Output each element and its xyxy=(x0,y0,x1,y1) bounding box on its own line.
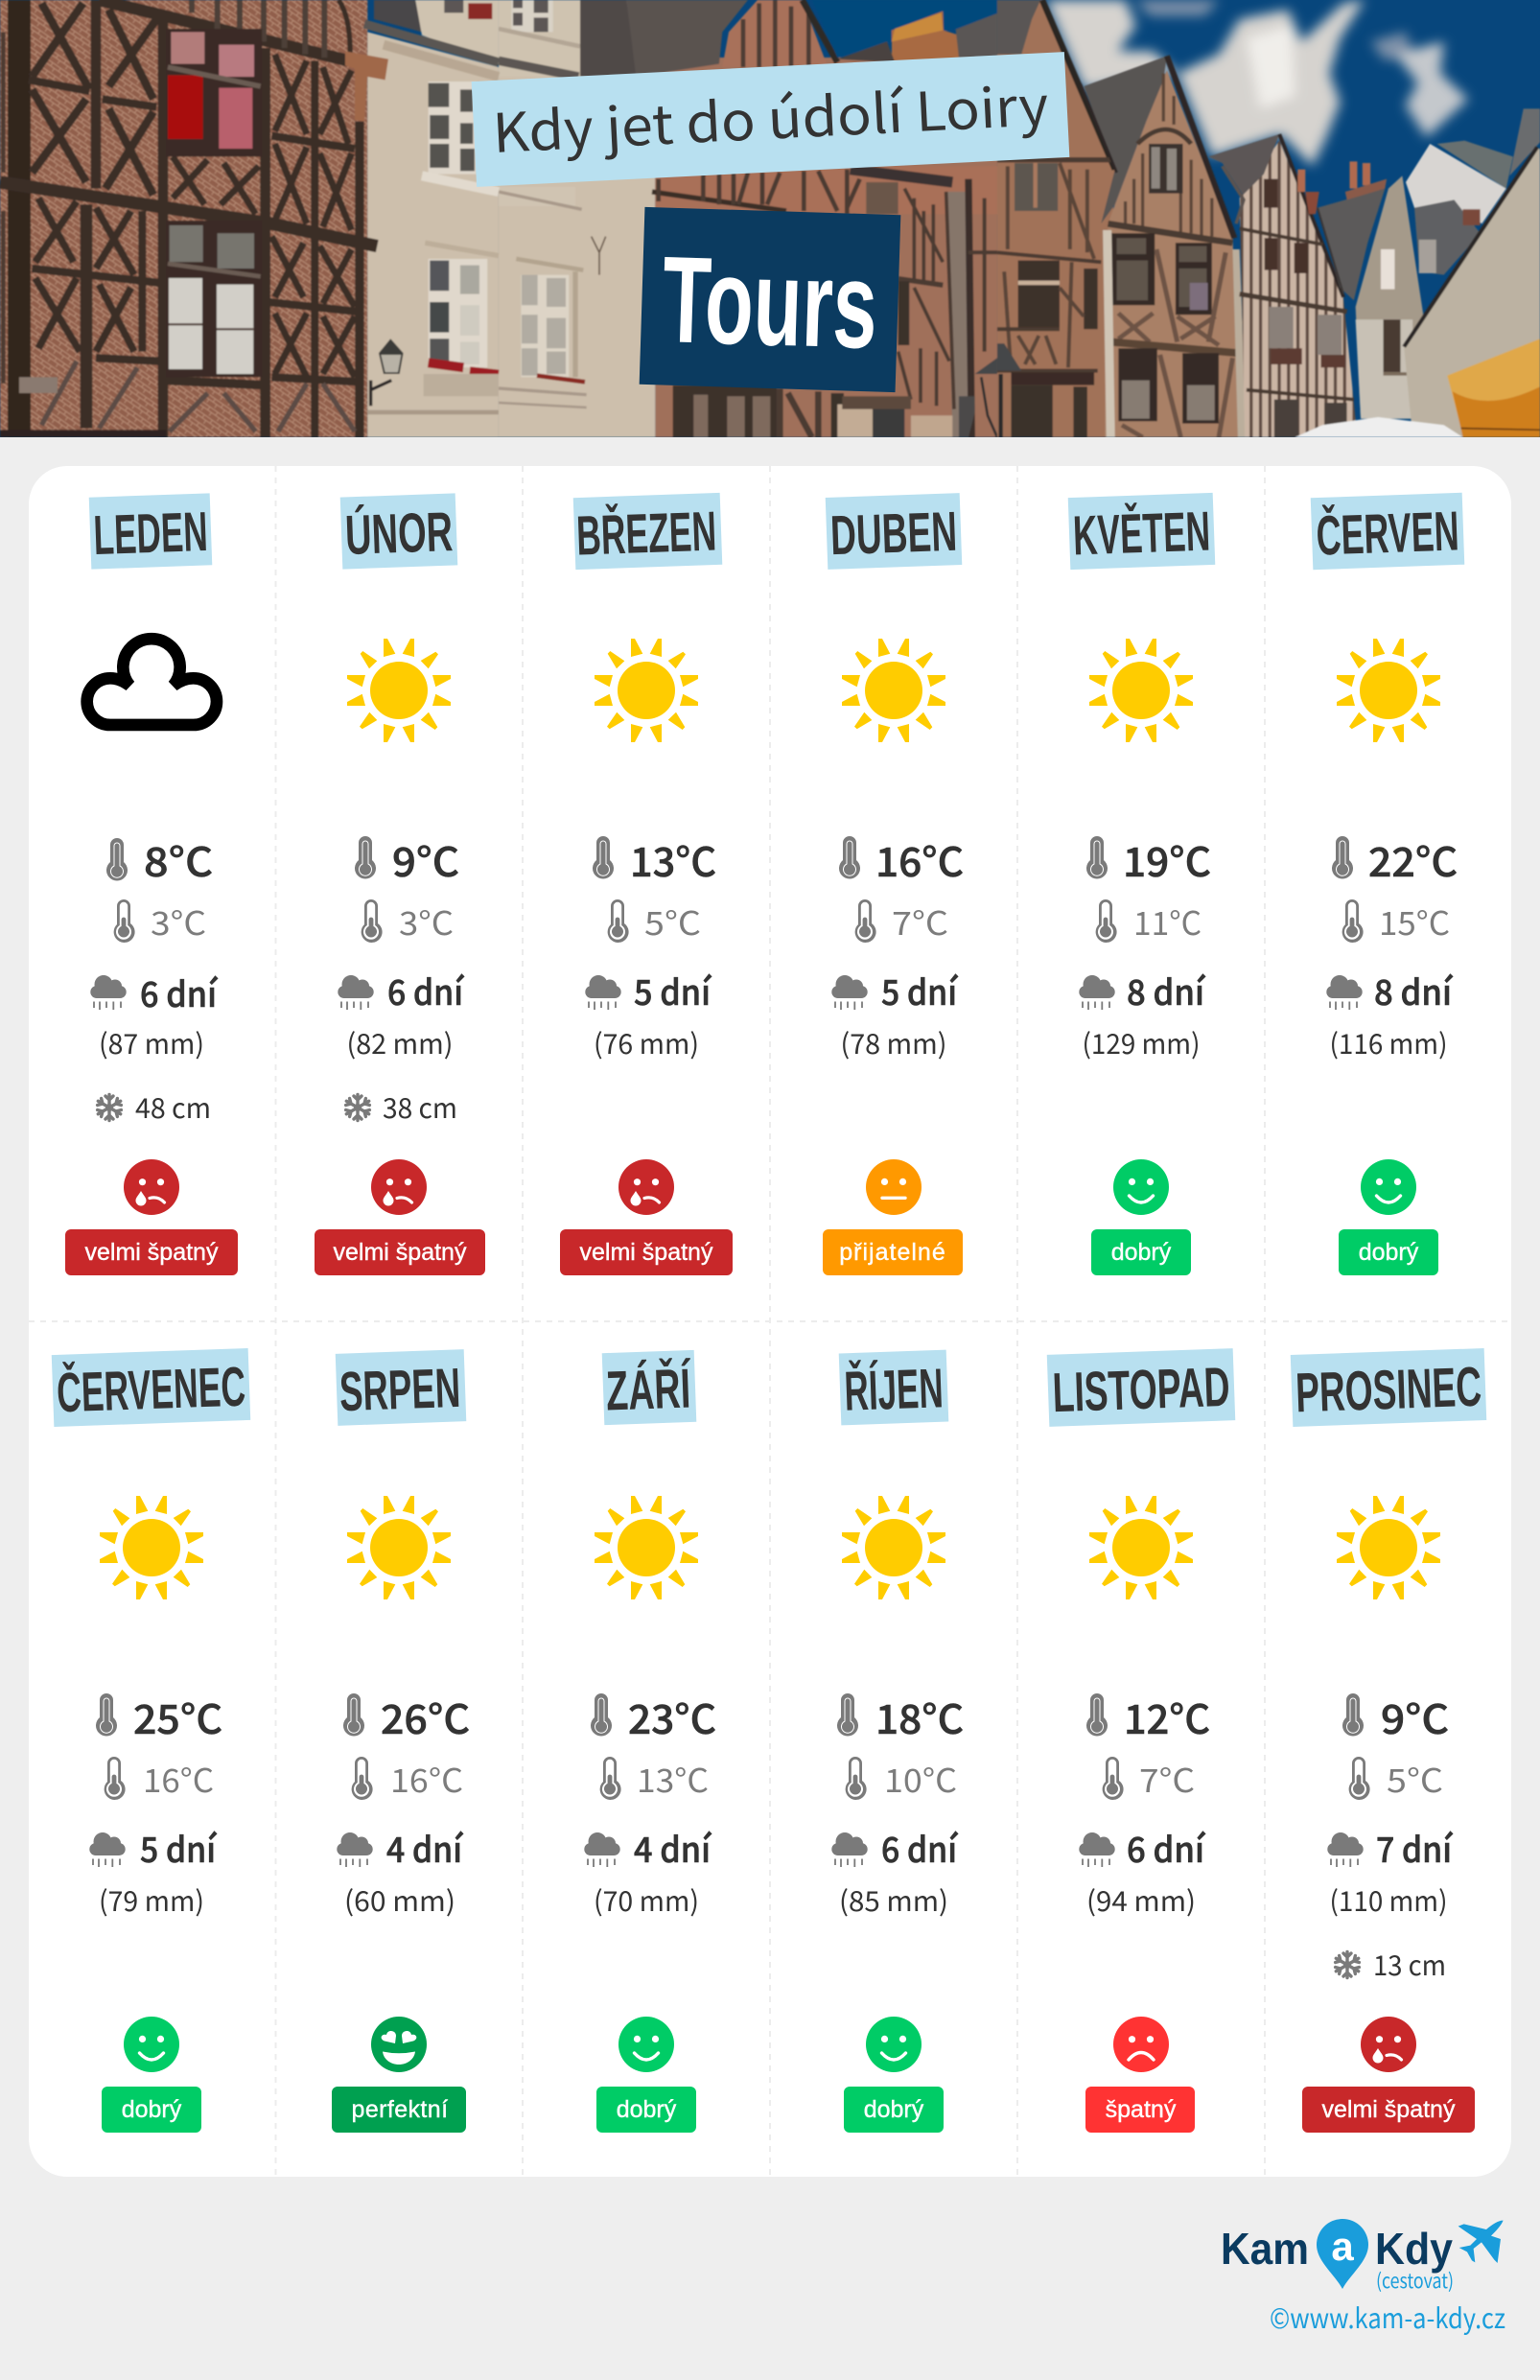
rainy days xyxy=(90,968,219,1017)
high temperature xyxy=(1332,830,1458,889)
high temperature: 16°C xyxy=(875,830,964,889)
high temperature xyxy=(96,1688,222,1746)
high temperature: 19°C xyxy=(1123,830,1211,889)
low temperature: 5°C xyxy=(1387,1755,1443,1802)
city name label xyxy=(640,207,900,392)
month label xyxy=(52,1348,250,1427)
snow depth xyxy=(96,1086,211,1127)
rating face xyxy=(866,1159,922,1215)
rating badge: dobrý xyxy=(122,2096,182,2123)
rainy days: 4 dní xyxy=(634,1823,712,1873)
month label: KVĚTEN xyxy=(1072,501,1211,567)
panel: ČERVEN xyxy=(1311,493,1464,1275)
icon: sun xyxy=(842,1496,945,1599)
rainy days xyxy=(89,1823,218,1873)
high temperature: 25°C xyxy=(133,1688,222,1746)
rainy days xyxy=(337,1823,464,1873)
rating badge xyxy=(1302,2087,1475,2133)
rating badge: dobrý xyxy=(1111,1239,1172,1266)
month label xyxy=(89,493,212,570)
high temperature: 9°C xyxy=(1381,1688,1449,1746)
high temperature xyxy=(593,830,716,889)
low temperature xyxy=(114,898,206,945)
precipitation: (60 mm) xyxy=(344,1879,455,1920)
low temperature xyxy=(855,898,948,945)
panel: KVĚTEN xyxy=(1068,493,1215,1275)
website url: ©www.kam-a-kdy.cz xyxy=(1270,2297,1505,2337)
rating face xyxy=(371,2017,427,2072)
rainy days xyxy=(338,966,465,1015)
rating face xyxy=(1361,2017,1416,2072)
rating face xyxy=(124,1159,179,1215)
panel: LEDEN xyxy=(65,493,238,1275)
panel: BŘEZEN xyxy=(560,493,733,1275)
rainy days: 5 dní xyxy=(634,966,712,1015)
precipitation: (78 mm) xyxy=(840,1022,947,1062)
rating badge xyxy=(65,1229,238,1275)
low temperature xyxy=(352,1755,463,1802)
panel: ČERVENEC xyxy=(52,1348,250,2133)
rating badge: dobrý xyxy=(864,2096,924,2123)
high temperature xyxy=(837,1688,964,1746)
month label: ZÁŘÍ xyxy=(605,1357,692,1423)
month label: SRPEN xyxy=(338,1357,461,1423)
icon: sun xyxy=(595,1496,698,1599)
icon: sun xyxy=(1089,639,1193,742)
rating badge xyxy=(823,1229,963,1275)
logo word Kam: Kam xyxy=(1221,2224,1309,2274)
panel: second row of months xyxy=(52,1348,1486,2133)
rating badge: perfektní xyxy=(352,2096,448,2123)
low temperature xyxy=(362,898,454,945)
rating face xyxy=(618,1159,674,1215)
panel: DUBEN xyxy=(823,493,964,1275)
low temperature xyxy=(600,1755,709,1802)
rainy days xyxy=(831,1823,959,1873)
rating face xyxy=(124,2017,179,2072)
rainy days: 4 dní xyxy=(386,1823,464,1873)
rainy days: 8 dní xyxy=(1127,966,1206,1015)
high temperature: 22°C xyxy=(1368,830,1458,889)
high temperature: 12°C xyxy=(1124,1688,1210,1746)
month label xyxy=(336,1349,466,1426)
icon: airplane xyxy=(1458,2221,1504,2263)
rating badge: přijatelné xyxy=(839,1239,946,1266)
rating badge xyxy=(332,2087,466,2133)
month label: ÚNOR xyxy=(344,501,454,567)
precipitation: (110 mm) xyxy=(1329,1879,1448,1920)
rating badge xyxy=(560,1229,733,1275)
icon: sun xyxy=(347,639,451,742)
low temperature xyxy=(846,1755,957,1802)
month label xyxy=(340,493,457,570)
panel: ZÁŘÍ xyxy=(584,1350,716,2133)
rating face xyxy=(866,2017,922,2072)
logo word Kdy: Kdy xyxy=(1375,2224,1453,2274)
icon: sun xyxy=(100,1496,203,1599)
precipitation: (82 mm) xyxy=(347,1022,453,1062)
rating badge: velmi špatný xyxy=(580,1239,713,1266)
rating badge xyxy=(315,1229,485,1275)
month label: ŘÍJEN xyxy=(843,1357,945,1423)
high temperature: 18°C xyxy=(875,1688,964,1746)
low temperature: 5°C xyxy=(644,898,701,945)
rating badge xyxy=(596,2087,696,2133)
rainy days: 6 dní xyxy=(881,1823,959,1873)
rating badge: špatný xyxy=(1106,2096,1177,2123)
low temperature: 16°C xyxy=(143,1755,214,1802)
high temperature: 8°C xyxy=(144,830,213,889)
month label xyxy=(1047,1348,1235,1427)
icon: sun xyxy=(347,1496,451,1599)
city name label: Tours xyxy=(661,231,879,375)
panel: monthly calendar card xyxy=(29,466,1511,2177)
rating face xyxy=(618,2017,674,2072)
rainy days: 5 dní xyxy=(140,1823,218,1873)
rating badge: velmi špatný xyxy=(85,1239,219,1266)
precipitation: (79 mm) xyxy=(99,1879,204,1920)
month label xyxy=(826,493,962,570)
month label xyxy=(1068,493,1215,570)
precipitation: (76 mm) xyxy=(594,1022,699,1062)
precipitation: (116 mm) xyxy=(1329,1022,1448,1062)
precipitation: (70 mm) xyxy=(594,1879,699,1920)
high temperature xyxy=(591,1688,716,1746)
rating badge xyxy=(1339,1229,1438,1275)
low temperature: 10°C xyxy=(884,1755,957,1802)
low temperature: 7°C xyxy=(892,898,948,945)
high temperature xyxy=(1342,1688,1449,1746)
month label: DUBEN xyxy=(829,501,958,567)
month label xyxy=(573,493,722,570)
snow depth: 13 cm xyxy=(1373,1944,1446,1984)
rainy days: 6 dní xyxy=(140,968,219,1017)
month label xyxy=(602,1350,696,1425)
low temperature xyxy=(1342,898,1450,945)
snow depth xyxy=(344,1086,457,1127)
rating face xyxy=(371,1159,427,1215)
low temperature: 15°C xyxy=(1379,898,1450,945)
month label xyxy=(839,1350,948,1425)
panel: SRPEN xyxy=(332,1349,470,2133)
panel: ÚNOR xyxy=(315,493,485,1275)
panel: ŘÍJEN xyxy=(831,1350,964,2133)
icon: map pin xyxy=(1317,2219,1368,2289)
high temperature xyxy=(355,830,459,889)
logo subtitle: (cestovat) xyxy=(1376,2266,1454,2295)
low temperature: 3°C xyxy=(399,898,454,945)
low temperature xyxy=(1349,1755,1443,1802)
rating badge xyxy=(1091,1229,1191,1275)
rainy days: 7 dní xyxy=(1376,1823,1454,1873)
icon: sun xyxy=(1337,1496,1440,1599)
month label: ČERVENEC xyxy=(56,1356,246,1424)
rating badge xyxy=(844,2087,944,2133)
rainy days xyxy=(1079,1823,1206,1873)
high temperature xyxy=(343,1688,470,1746)
snow depth: 38 cm xyxy=(383,1086,457,1127)
low temperature: 11°C xyxy=(1133,898,1202,945)
panel: PROSINEC xyxy=(1291,1348,1486,2133)
icon: sun xyxy=(1089,1496,1193,1599)
rainy days xyxy=(585,966,712,1015)
high temperature: 23°C xyxy=(628,1688,716,1746)
rainy days: 8 dní xyxy=(1374,966,1454,1015)
precipitation: (94 mm) xyxy=(1086,1879,1196,1920)
icon: sun xyxy=(1337,639,1440,742)
high temperature: 13°C xyxy=(630,830,716,889)
month label: BŘEZEN xyxy=(575,501,717,568)
logo: Kam a Kdy xyxy=(1221,2219,1505,2337)
high temperature: 9°C xyxy=(392,830,459,889)
low temperature: 13°C xyxy=(637,1755,709,1802)
snow depth: 48 cm xyxy=(135,1086,211,1127)
month label xyxy=(1311,493,1464,570)
low temperature: 7°C xyxy=(1139,1755,1195,1802)
low temperature xyxy=(1103,1755,1195,1802)
high temperature xyxy=(1086,1688,1210,1746)
high temperature xyxy=(106,830,213,889)
rainy days xyxy=(831,966,959,1015)
rating badge: dobrý xyxy=(1359,1239,1419,1266)
snow depth xyxy=(1334,1944,1446,1984)
rating face xyxy=(1113,2017,1169,2072)
rating face xyxy=(1113,1159,1169,1215)
rainy days: 6 dní xyxy=(1127,1823,1206,1873)
rainy days: 5 dní xyxy=(881,966,959,1015)
low temperature xyxy=(105,1755,214,1802)
rating face xyxy=(1361,1159,1416,1215)
low temperature: 16°C xyxy=(390,1755,463,1802)
rating badge: dobrý xyxy=(617,2096,677,2123)
icon: sun xyxy=(595,639,698,742)
rating badge: velmi špatný xyxy=(334,1239,467,1266)
rainy days: 6 dní xyxy=(387,966,465,1015)
title ribbon xyxy=(472,52,1069,187)
rating badge: velmi špatný xyxy=(1322,2096,1456,2123)
panel: LISTOPAD xyxy=(1047,1348,1235,2133)
rating badge xyxy=(102,2087,201,2133)
low temperature: 3°C xyxy=(151,898,206,945)
icon: map pin: a xyxy=(1331,2224,1354,2269)
title ribbon: Kdy jet do údolí Loiry xyxy=(491,63,1050,169)
icon: cloud xyxy=(87,639,217,725)
low temperature xyxy=(1096,898,1202,945)
header photo: half-timbered houses of Tours xyxy=(0,0,1540,437)
high temperature: 26°C xyxy=(381,1688,470,1746)
month label: LEDEN xyxy=(92,501,209,567)
icon: sun xyxy=(842,639,945,742)
rainy days xyxy=(584,1823,712,1873)
low temperature xyxy=(608,898,701,945)
month label: LISTOPAD xyxy=(1052,1356,1231,1424)
rating badge xyxy=(1085,2087,1195,2133)
precipitation: (85 mm) xyxy=(839,1879,948,1920)
precipitation: (129 mm) xyxy=(1082,1022,1201,1062)
rainy days xyxy=(1327,1823,1454,1873)
precipitation: (87 mm) xyxy=(99,1022,204,1062)
rainy days xyxy=(1326,966,1454,1015)
rainy days xyxy=(1079,966,1206,1015)
